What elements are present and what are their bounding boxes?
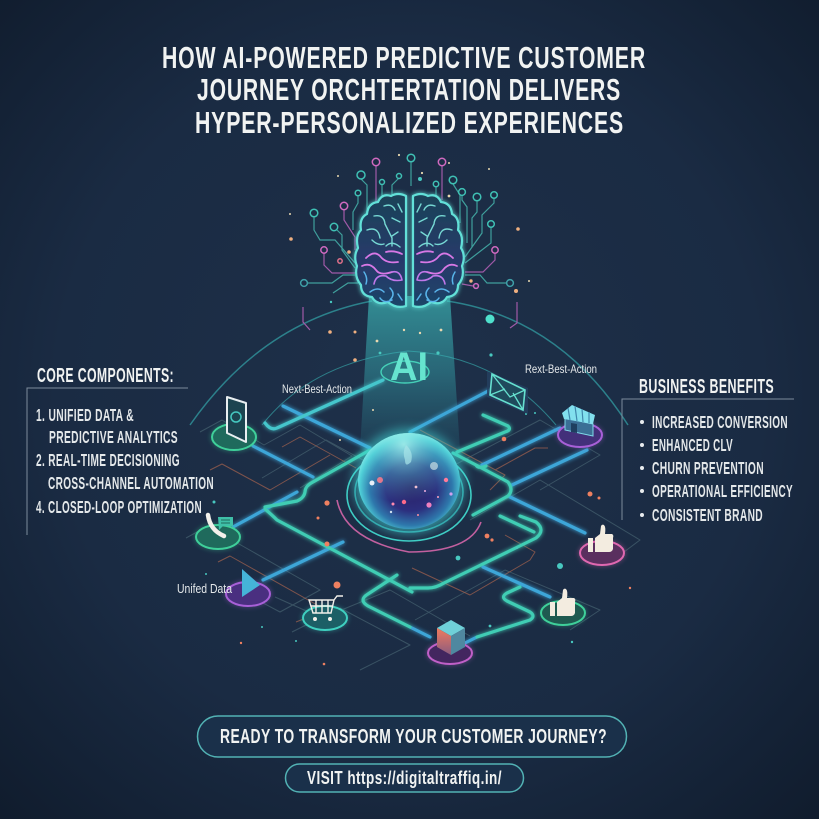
teal connector tracks — [265, 380, 541, 637]
icon: envelope — [487, 371, 528, 414]
blue connector tracks — [233, 390, 587, 643]
panel: core components: 2. REAL-TIME DECISIONING — [36, 450, 180, 470]
sphere base rings — [337, 449, 481, 552]
icon: mobile phone — [210, 397, 258, 452]
left hemisphere — [355, 194, 406, 307]
icon: play triangle — [224, 569, 272, 608]
panel: core components: 1. UNIFIED DATA & — [36, 405, 134, 425]
icon: storefront — [556, 405, 604, 449]
panel: business benefits: ENHANCED CLV — [652, 435, 733, 455]
panel: core components: 4. CLOSED-LOOP OPTIMIZATION — [36, 497, 202, 517]
panel: core components: CROSS-CHANNEL AUTOMATION — [48, 473, 214, 493]
title: JOURNEY ORCHTERTATION DELIVERS — [197, 72, 621, 107]
panel: core components: CORE COMPONENTS: — [37, 365, 174, 387]
call to action button — [198, 716, 626, 757]
icon: thumbs up pink — [578, 525, 626, 567]
panel: core components: PREDICTIVE ANALYTICS — [49, 427, 178, 447]
label: unified data: Unifed Data — [177, 582, 232, 596]
brain — [355, 194, 464, 307]
title — [162, 40, 646, 140]
floating particles — [205, 154, 631, 665]
icon: phone call and chat — [194, 515, 242, 551]
icon: thumbs up green — [539, 589, 587, 627]
panel: business benefits — [622, 376, 794, 525]
label: next best action right: Rext-Best-Action — [525, 362, 597, 376]
title: HYPER-PERSONALIZED EXPERIENCES — [195, 105, 624, 140]
website link button: VISIT https://digitaltraffiq.in/ — [307, 768, 502, 788]
right hemisphere — [413, 194, 464, 307]
arcs around the AI core — [190, 301, 628, 425]
channel connector tracks — [233, 380, 587, 643]
brain circuit traces — [301, 154, 517, 330]
icon: product box — [426, 620, 474, 666]
icon: shopping cart — [301, 596, 349, 632]
faint background circuit board — [186, 420, 640, 670]
light beam from brain to sphere — [360, 296, 460, 450]
label: next best action left: Next-Best-Action — [282, 382, 352, 396]
AI label with halo: AI — [390, 345, 428, 389]
call to action button: READY TO TRANSFORM YOUR CUSTOMER JOURNEY? — [220, 725, 607, 748]
glass sphere — [353, 428, 465, 534]
panel: core components — [27, 365, 214, 535]
website link button — [286, 764, 524, 792]
